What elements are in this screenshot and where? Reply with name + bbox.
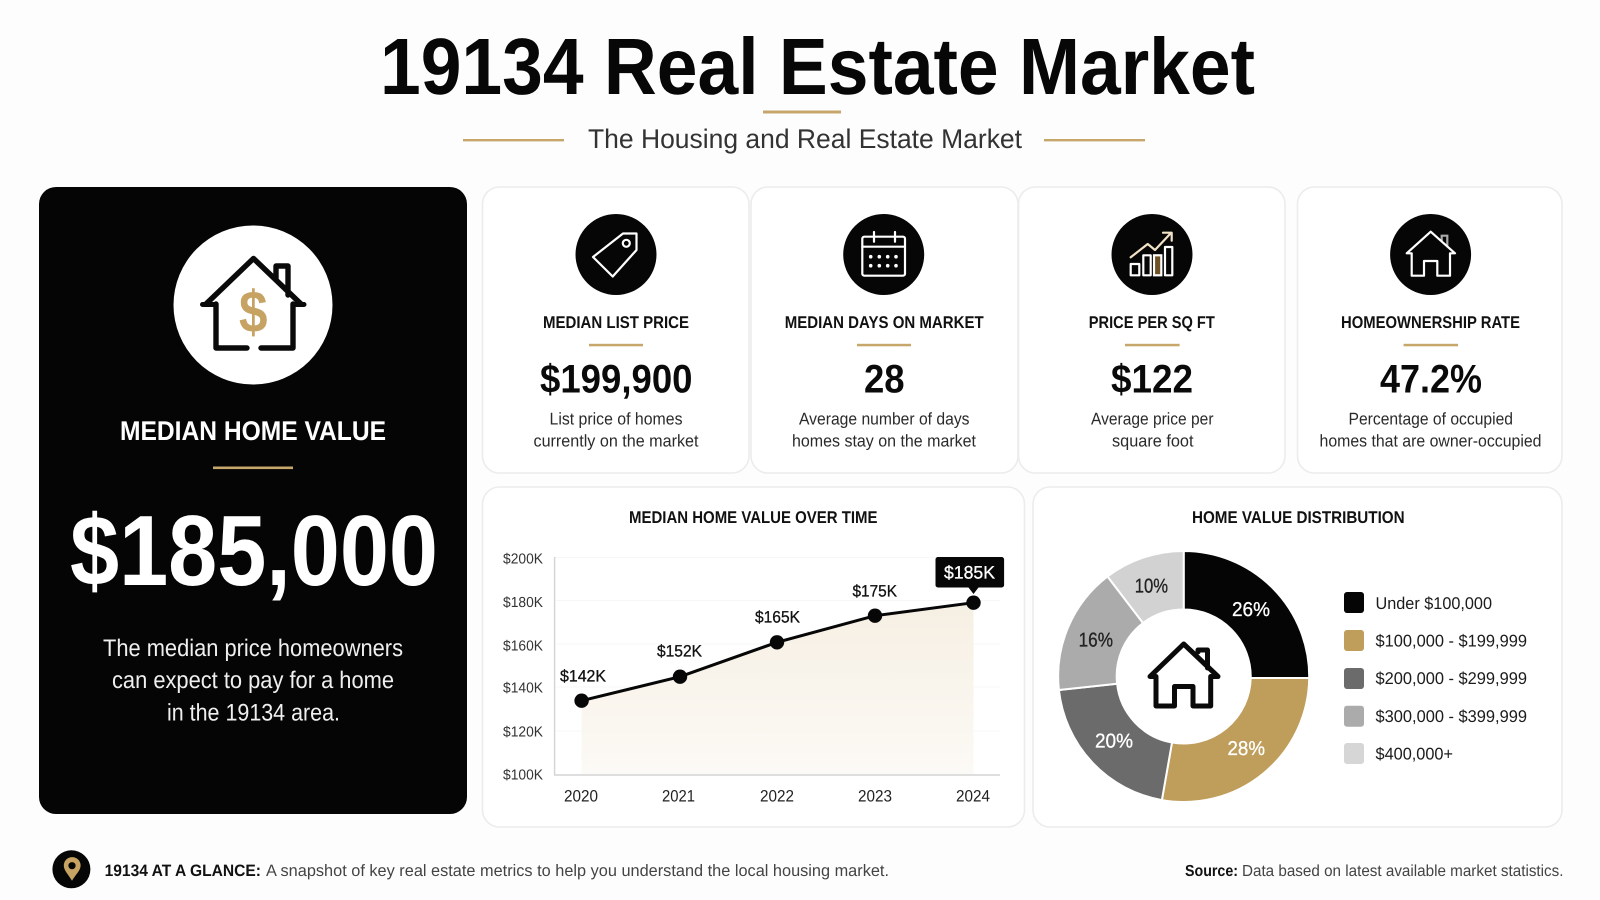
legend: Under $100,000 [1376,594,1492,613]
panel: price per sq ft: $122 [1111,358,1193,402]
line chart: $100K [503,768,543,784]
panel: median days on market: homes stay on the market [792,432,976,450]
chart heading: MEDIAN HOME VALUE OVER TIME [629,508,878,527]
icon: price tag [576,214,656,295]
line chart: $180K [503,595,543,611]
donut chart: 10% [1135,576,1168,598]
line chart: $160K [503,638,543,654]
panel: price per sq ft: square foot [1112,432,1194,450]
donut chart: 16% [1079,630,1113,652]
panel: median list price: MEDIAN LIST PRICE [543,313,689,332]
panel description: in the 19134 area. [167,700,340,726]
panel: price per sq ft [1018,187,1285,473]
panel: median list price: $199,900 [540,358,692,402]
line chart: 2022 [760,788,794,806]
big value: $185,000 [70,495,438,607]
panel: price per sq ft: Average price per [1091,410,1214,428]
legend: $300,000 - $399,999 [1376,707,1527,726]
donut chart: 28% [1228,738,1265,760]
icon: house [1150,644,1218,706]
icon: location pin [52,850,90,888]
line chart: $142K [560,668,606,686]
panel: home value distribution [1033,487,1562,827]
line chart: $200K [503,552,543,568]
panel: homeownership rate: homes that are owner-occupied [1320,432,1542,450]
subtitle: The Housing and Real Estate Market [588,124,1022,154]
donut chart: 20% [1095,730,1133,752]
panel: median days on market: Average number of days [799,410,970,428]
legend: $200,000 - $299,999 [1376,669,1527,688]
icon: rising bar chart [1112,214,1192,295]
panel: price per sq ft: PRICE PER SQ FT [1089,313,1215,332]
panel: median list price: List price of homes [550,410,682,428]
panel description: The median price homeowners [103,635,403,662]
donut chart: 26% [1232,599,1270,621]
line chart: 2023 [858,788,892,806]
icon: calendar [843,214,924,295]
title underline [763,110,841,114]
panel: median list price: currently on the market [534,432,699,450]
panel: homeownership rate: HOMEOWNERSHIP RATE [1341,313,1520,332]
donut chart [1058,551,1309,802]
line chart: 2020 [564,788,598,806]
legend: $400,000+ [1376,745,1453,764]
callout: 2024 value: $185K [944,563,995,583]
panel: median list price [482,187,749,473]
title: 19134 Real Estate Market [380,22,1255,111]
panel: median days on market [751,187,1018,473]
line chart: $140K [503,681,543,697]
panel description [103,635,403,726]
line chart [503,552,1004,806]
line chart: $175K [852,583,897,601]
icon: house with dollar sign [174,226,332,384]
panel heading: MEDIAN HOME VALUE [120,416,386,446]
panel: homeownership rate: 47.2% [1380,358,1482,402]
icon: house [1390,214,1471,295]
footer: source: Data based on latest available market statistics. [1242,863,1564,880]
footer: at a glance: 19134 AT A GLANCE: [105,862,261,880]
chart heading: HOME VALUE DISTRIBUTION [1192,508,1405,527]
panel: median days on market: 28 [864,358,905,402]
panel description: can expect to pay for a home [112,667,394,694]
line chart: $120K [503,724,543,740]
legend: $100,000 - $199,999 [1376,632,1527,651]
icon: house with dollar sign: $ [239,279,268,345]
legend [1344,592,1527,764]
callout: 2024 value [936,557,1004,594]
line chart: 2021 [662,788,695,806]
panel: median days on market: MEDIAN DAYS ON MARKET [785,313,984,332]
footer: at a glance: A snapshot of key real estate metrics to help you understand the local housing market. [266,862,889,880]
line chart: $165K [755,608,800,626]
panel: median home value over time [482,487,1024,827]
panel: homeownership rate: Percentage of occupied [1348,410,1513,428]
panel: homeownership rate [1298,187,1562,473]
line chart: $152K [657,643,702,661]
panel: median home value [39,187,467,814]
footer: source: Source: [1185,863,1238,880]
line chart: 2024 [956,788,990,806]
